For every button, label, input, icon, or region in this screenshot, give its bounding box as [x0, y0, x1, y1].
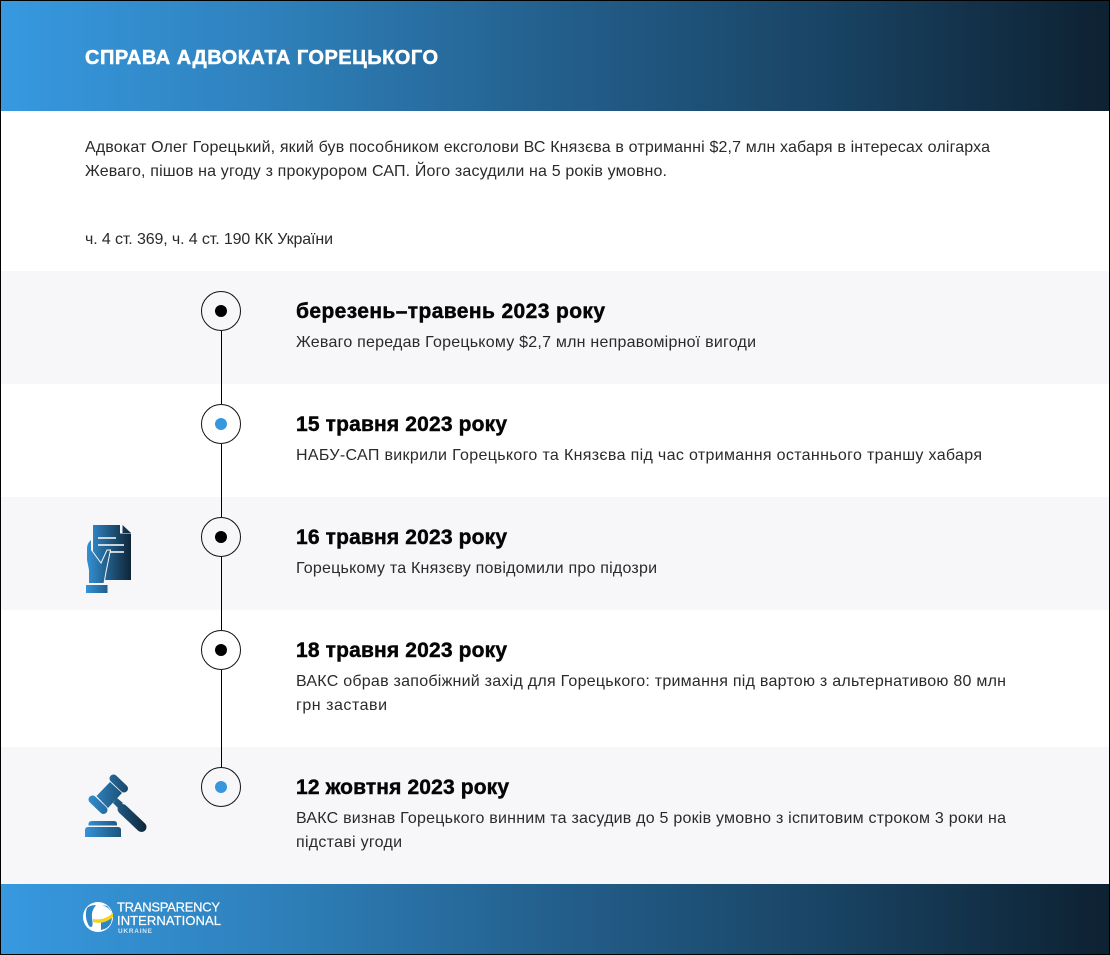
event 2: 15 травня 2023 року [296, 413, 507, 436]
event 5: 12 жовтня 2023 року [296, 776, 509, 799]
event 5: підставі угоди [296, 834, 402, 851]
logo: Transparency International Ukraine [83, 900, 221, 935]
title: СПРАВА АДВОКАТА ГОРЕЦЬКОГО [85, 47, 438, 69]
event 4: грн застави [296, 697, 387, 714]
footer band [0, 884, 1110, 954]
timeline row 5 band [0, 747, 1110, 884]
intro text: Жеваго, пішов на угоду з прокурором САП. Його засудили на 5 років умовно. [85, 161, 667, 180]
event 2 [296, 413, 982, 464]
event 2: НАБУ-САП викрили Горецького та Князєва під час отримання останнього траншу хабаря [296, 447, 982, 464]
logo: Transparency International Ukraine: UKRAINE [118, 928, 153, 935]
timeline row 1 band [0, 271, 1110, 384]
timeline row 3 band [0, 497, 1110, 610]
event 1: Жеваго передав Горецькому $2,7 млн неправомірної вигоди [296, 334, 756, 351]
event 4: 18 травня 2023 року [296, 639, 507, 662]
header band [0, 0, 1110, 111]
marker 1 [202, 292, 240, 330]
intro text [85, 139, 990, 180]
marker 5 [202, 768, 240, 806]
event 4 [296, 639, 1006, 714]
event 3 [296, 526, 657, 577]
event 5: ВАКС визнав Горецького винним та засудив до 5 років умовно з іспитовим строком 3 роки на [296, 810, 1006, 827]
marker 3 [202, 518, 240, 556]
event 1 [296, 300, 756, 351]
event 1: березень–травень 2023 року [296, 300, 605, 323]
marker 4 [202, 630, 240, 670]
event 3: 16 травня 2023 року [296, 526, 507, 549]
event 4: ВАКС обрав запобіжний захід для Горецького: тримання під вартою з альтернативою 80 млн [296, 673, 1006, 690]
timeline axis [220, 331, 222, 767]
event 3: Горецькому та Князєву повідомили про підозри [296, 560, 657, 577]
legal articles: ч. 4 ст. 369, ч. 4 ст. 190 КК України [85, 231, 333, 248]
intro text: Адвокат Олег Горецький, який був пособником ексголови ВС Князєва в отриманні $2,7 млн хабаря в інтересах олігарха [85, 139, 990, 156]
icon: gavel [85, 778, 142, 837]
marker 2 [202, 404, 240, 444]
event 5 [296, 776, 1006, 851]
logo: Transparency International Ukraine: INTERNATIONAL [117, 913, 221, 928]
icon: hand with document [86, 525, 131, 593]
logo: Transparency International Ukraine: TRANSPARENCY [117, 900, 220, 914]
